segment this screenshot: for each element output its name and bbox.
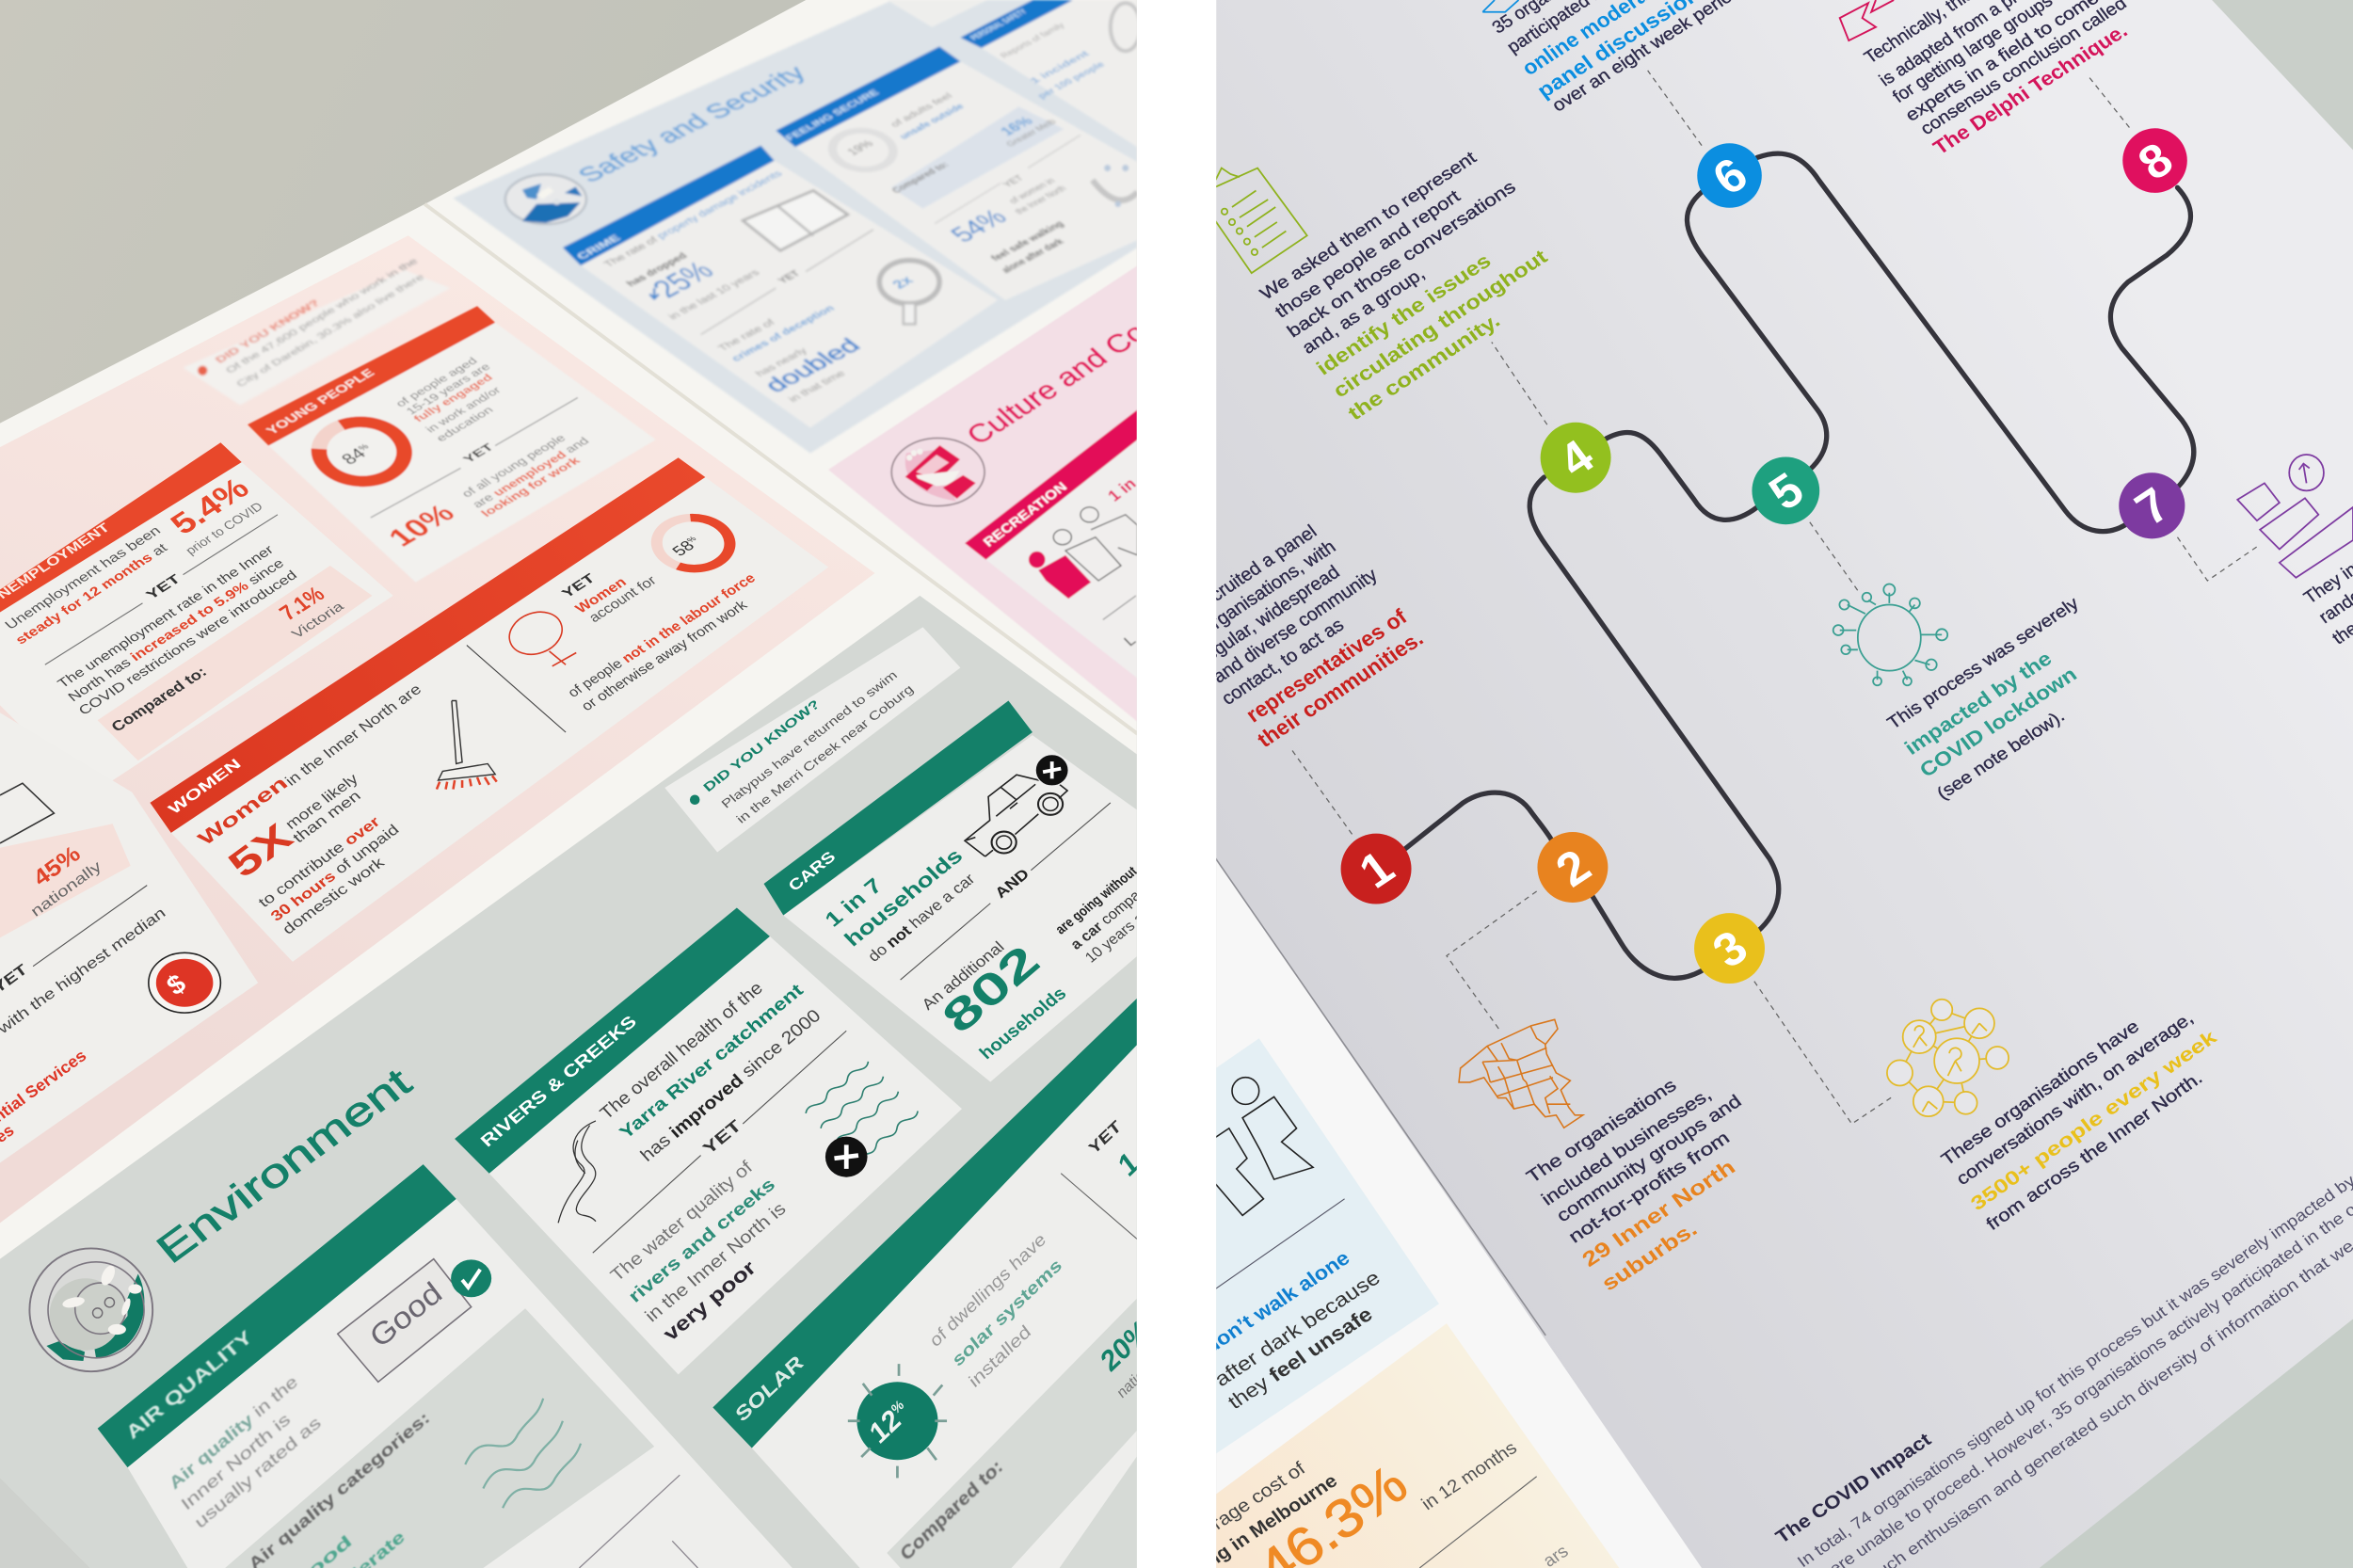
- text block: step 3 conversations: 3500+ people every week: [1967, 1026, 2221, 1215]
- card: feeling secure: [776, 46, 1138, 300]
- card: crime: The rate of property damage incidents: [601, 168, 786, 269]
- card: crime: has dropped: [624, 251, 690, 289]
- icon: cropped outline box: [0, 783, 54, 843]
- card: feeling secure: Compared to:: [890, 161, 952, 195]
- card: solar: 1: [1112, 1144, 1144, 1183]
- card: young people: 84: [338, 445, 371, 468]
- card: cars: are going without: [1052, 864, 1141, 937]
- card: women: %: [684, 535, 698, 544]
- text block: step 4 identify the issues: those people and report: [1272, 185, 1465, 322]
- text block: step 2 organisations: included businesses,: [1538, 1085, 1716, 1209]
- card: rivers and creeks: YET: [699, 1116, 745, 1158]
- icon: inner north suburbs map: [1459, 1019, 1583, 1128]
- card: feeling secure: FEELING SECURE: [784, 88, 882, 143]
- text block: step 3 conversations: [1937, 1008, 2221, 1234]
- card: women: in the Inner North are: [282, 681, 425, 789]
- compared box: 45 percent nationally: 45%: [28, 840, 86, 891]
- step 5 node: 5: [1759, 462, 1814, 520]
- card: rivers and creeks: RIVERS & CREEKS: [476, 1012, 640, 1150]
- card: recreation: L: [1121, 632, 1140, 649]
- icon: blue cropped shape: [1482, 0, 1519, 12]
- card: women: to contribute over: [256, 814, 383, 911]
- card: solar: installed: [965, 1320, 1034, 1391]
- text block: step 5 covid impact note: COVID lockdown: [1915, 663, 2081, 782]
- card: personal safety: [960, 0, 1141, 147]
- top sliver card: [887, 0, 987, 27]
- step 1 node: [1341, 834, 1412, 904]
- heading: safety and security: Safety and Security: [571, 60, 812, 186]
- text block: step 1 recruit a panel: a regular, widespread: [1182, 562, 1344, 677]
- card: air quality: AIR QUALITY: [122, 1327, 257, 1444]
- text block: step 2 organisations: 29 Inner North: [1577, 1155, 1739, 1272]
- card: rivers and creeks: in the Inner North is: [642, 1199, 790, 1326]
- card: young people: of people aged: [392, 355, 480, 409]
- card: feeling secure: 16%: [998, 115, 1037, 138]
- card: unemployment: The unemployment rate in the Inner: [55, 543, 277, 691]
- grey paper page: [1215, 0, 2353, 1568]
- text block: step 2 organisations: suburbs.: [1597, 1217, 1702, 1295]
- card: cars: [764, 701, 1175, 1081]
- card: unemployment: prior to COVID: [183, 500, 265, 557]
- card: women: domestic work: [280, 856, 388, 937]
- step 2 node: 2: [1545, 839, 1600, 897]
- donut chart: 58 percent: [651, 514, 736, 572]
- card: cars: CARS: [785, 848, 840, 895]
- compared to box: 7.1%: [275, 583, 329, 625]
- centre fold of the spread: [424, 204, 1138, 734]
- text block: step 4 identify the issues: [1257, 147, 1552, 424]
- step 7 node: 7: [2125, 477, 2180, 536]
- card: recreation: 1 in: [1104, 474, 1140, 504]
- icon: car with plus badge: [965, 755, 1068, 856]
- card: crime: crimes of deception: [729, 304, 838, 363]
- card: young people: looking for work: [478, 454, 584, 519]
- text block: step 4 identify the issues: circulating throughout: [1329, 246, 1552, 402]
- card: women: more likely: [282, 772, 361, 833]
- text block: step 1 recruit a panel: We recruited a panel: [1165, 521, 1321, 632]
- text block: step 4 identify the issues: identify the issues: [1312, 249, 1496, 379]
- icon: sun with 12 percent: %: [889, 1397, 907, 1417]
- card: young people: YOUNG PEOPLE: [264, 366, 377, 437]
- right photo: engagement process page: [1145, 0, 2353, 1568]
- booklet underneath: [1146, 858, 1702, 1568]
- card: unemployment: Unemployment has been: [2, 523, 164, 632]
- card: feeling secure: YET: [1001, 174, 1027, 189]
- card: air quality: [98, 1164, 792, 1568]
- card: rivers and creeks: Yarra River catchment: [616, 980, 808, 1144]
- card: young people: 10%: [381, 499, 461, 552]
- card: crime: has nearly: [753, 346, 810, 378]
- card: crime: in the last 10 years: [666, 268, 763, 322]
- text block: step 5 covid impact note: impacted by the: [1900, 648, 2057, 760]
- panel: employment section pink background: [0, 235, 875, 1223]
- card: women: 58: [668, 537, 698, 559]
- card: women: Women: [194, 773, 293, 850]
- card: did you know, Darebin workers: [184, 257, 450, 405]
- card: women: YET: [559, 571, 599, 601]
- card: personal safety: Reports of family: [999, 22, 1067, 60]
- text block: step 4 identify the issues: We asked them to represent: [1257, 147, 1481, 303]
- icon: female symbol: [508, 611, 577, 666]
- compared to box: Compared to:: [108, 664, 210, 735]
- card: young people: [248, 306, 656, 583]
- panel: cream cost of living card: [1146, 1323, 1619, 1568]
- card: crime: doubled: [760, 335, 866, 396]
- card: feeling secure: the Inner North: [1014, 184, 1069, 216]
- step 4 node: [1541, 423, 1611, 493]
- bottom-left background corner: [0, 1478, 90, 1568]
- card: feeling secure: 19%: [843, 137, 876, 157]
- card: women: 30 hours of unpaid: [267, 823, 403, 924]
- card: women: of people not in the labour force: [565, 570, 759, 700]
- card: young people: education: [433, 404, 496, 443]
- paper sheet: [0, 0, 1137, 1259]
- card: feeling secure: feel safe walking: [989, 219, 1066, 263]
- icon: people network: [1887, 1000, 2009, 1116]
- panel: environment section background: [0, 596, 1138, 1568]
- compared box: 45 percent nationally: [0, 824, 131, 937]
- panel: cream cost of living card: in 12 months: [1418, 1438, 1521, 1514]
- card: cars: a car compared to: [1067, 864, 1175, 952]
- compared to box: Victoria: [289, 600, 347, 642]
- text block: step 1 recruit a panel: contact, to act as: [1218, 615, 1348, 710]
- card: young people: %: [357, 442, 372, 453]
- icon: sun with 12 percent: 12: [865, 1403, 906, 1450]
- background corner top right: [2212, 0, 2353, 150]
- card: young people: YET: [459, 440, 497, 465]
- icon: water waves: [804, 1060, 920, 1165]
- card: crime: YET: [776, 269, 803, 285]
- card: solar: SOLAR: [732, 1352, 808, 1427]
- card: crime: in that time: [786, 369, 848, 404]
- icon: virus: [1833, 584, 1947, 685]
- card: young people: in work and/or: [423, 384, 504, 435]
- card: did you know, platypus: DID YOU KNOW?: [700, 697, 823, 794]
- card: cars: households: [976, 984, 1070, 1064]
- icon: winding river: [558, 1121, 596, 1223]
- text block: step 5 covid impact note: This process was severely: [1883, 593, 2083, 732]
- text block: step 2 organisations: not-for-profits from: [1565, 1128, 1734, 1247]
- icon: broom: [437, 701, 497, 790]
- icon: plus badge: [825, 1137, 868, 1177]
- icon: purple ranking boxes: [2237, 455, 2353, 578]
- card: women: account for: [585, 573, 660, 626]
- text block: step 2 organisations: community groups and: [1553, 1092, 1746, 1226]
- card: cars: AND: [992, 867, 1032, 902]
- card: air quality: Inner North is: [178, 1409, 294, 1514]
- text block: step 3 conversations: These organisations have: [1937, 1016, 2142, 1169]
- text block: step 1 recruit a panel: and diverse community: [1209, 565, 1382, 687]
- card: unemployment: 5.4%: [164, 472, 256, 541]
- card: crime: [563, 146, 998, 427]
- good rating box: [338, 1259, 491, 1382]
- compared to box: nationally: [1114, 1345, 1170, 1401]
- card: cars: households: [840, 844, 968, 951]
- card: unemployment: North has increased to 5.9% since: [65, 556, 287, 705]
- card: did you know, Darebin workers: Of the 47,600 people who work in the: [224, 257, 421, 376]
- step 5 node: [1752, 456, 1819, 524]
- card: solar: YET: [1085, 1116, 1125, 1158]
- text block: step 5 covid impact note: [1883, 593, 2083, 803]
- card: rivers and creeks: [455, 908, 962, 1374]
- step 3 node: [1694, 913, 1765, 984]
- card: women: or otherwise away from work: [578, 598, 751, 714]
- card: rivers and creeks: rivers and creeks: [625, 1175, 779, 1306]
- card: crime: 25%: [646, 257, 721, 303]
- icon: air waves: [465, 1399, 581, 1508]
- icon: dollar coin: $: [162, 968, 192, 1001]
- panel: pale blue safety card: after dark because: [1210, 1267, 1385, 1391]
- card: rivers and creeks: has improved since 2000: [637, 1006, 824, 1166]
- card: did you know, Darebin workers: City of Darebin, 30.3% also live there: [234, 273, 427, 389]
- card: women: Women: [572, 575, 630, 616]
- card: personal safety: 1 incident: [1029, 50, 1093, 86]
- step 8 node: 8: [2128, 133, 2183, 190]
- card: young people: fully engaged: [410, 372, 496, 424]
- card: cars: do not have a car: [864, 870, 979, 966]
- panel: culture and community: [828, 265, 1153, 722]
- card: air quality: usually rated as: [191, 1413, 325, 1532]
- card: unemployment: steady for 12 months at: [13, 541, 170, 648]
- card: personal safety: per 100 people: [1036, 60, 1108, 101]
- card: women: [150, 457, 828, 962]
- good rating box: Good: [363, 1275, 448, 1354]
- dashed leader lines: [1292, 71, 2260, 1124]
- card: young people: 15-19 years are: [403, 360, 494, 417]
- text block: step 4 identify the issues: back on those conversations: [1283, 177, 1519, 341]
- donut chart: 84 percent: [311, 416, 413, 488]
- text block: step 8 Delphi technique: The Delphi Technique.: [1929, 20, 2132, 159]
- text block: the covid impact footnote: In total, 74 organisations signed up for this process but it was severely impacted by: [1794, 1171, 2353, 1568]
- card: rivers and creeks: The water quality of: [607, 1158, 758, 1286]
- text block: step 4 identify the issues: the community.: [1344, 310, 1504, 424]
- heading: environment: Environment: [148, 1061, 420, 1272]
- compared to box: 20%: [1096, 1314, 1156, 1378]
- text block: step 4 identify the issues: and, as a group,: [1298, 264, 1429, 358]
- card: women: 5X: [218, 815, 301, 886]
- panel: pale blue safety card: don’t walk alone: [1200, 1247, 1354, 1358]
- card: women: WOMEN: [166, 757, 245, 818]
- card: did you know, platypus: [664, 627, 960, 853]
- icon: possum badge: [29, 1248, 152, 1371]
- heading: culture and community: Culture and Co: [961, 318, 1153, 450]
- card: recreation: RECREATION: [981, 480, 1070, 550]
- card: feeling secure: 54%: [945, 205, 1014, 247]
- icon: magenta ribbon: [1840, 0, 1894, 40]
- card: feeling secure: of women in: [1007, 177, 1058, 206]
- card: solar: of dwellings have: [926, 1228, 1049, 1351]
- text block: step 8 Delphi technique: [1861, 0, 2132, 159]
- card: did you know, platypus: in the Merri Creek near Coburg: [733, 682, 916, 826]
- card: feeling secure: alone after dark: [1000, 237, 1067, 275]
- card: crime: 2x: [889, 274, 917, 292]
- card: crime: The rate of: [716, 317, 778, 353]
- background corner bottom right: [2040, 1319, 2353, 1568]
- photo background: [0, 0, 1138, 1568]
- compared to box: [887, 1298, 1170, 1568]
- card: feeling secure: of adults feel: [888, 92, 955, 129]
- text block: step 3 conversations: from across the Inner North.: [1982, 1067, 2206, 1234]
- card: women: than men: [290, 789, 364, 846]
- icon: raised hand with ticket: [891, 439, 984, 506]
- icon: sun with 12 percent: [848, 1364, 947, 1478]
- icon: safety badge: [505, 174, 586, 224]
- icon: dollar coin: [149, 952, 220, 1013]
- text block: step 1 recruit a panel: representatives of: [1241, 604, 1412, 727]
- card: cars: 1 in 7: [820, 873, 887, 931]
- card: crime: CRIME: [575, 233, 623, 262]
- section background: [454, 0, 1138, 453]
- card: rivers and creeks: very poor: [659, 1256, 761, 1345]
- step 2 node: [1537, 832, 1608, 903]
- panel: pale blue safety card: [1200, 1038, 1439, 1454]
- step 6 node: 6: [1703, 148, 1757, 205]
- card: unemployment: COVID restrictions were introduced: [76, 568, 300, 718]
- panel: safety and security: [454, 0, 1141, 453]
- text block: step 2 organisations: [1523, 1076, 1746, 1295]
- card: recreation: [965, 409, 1140, 679]
- card: air quality: Air quality in the: [166, 1371, 301, 1493]
- icon: clipboard checklist: [1197, 168, 1307, 273]
- text block: step 2 organisations: The organisations: [1523, 1076, 1680, 1187]
- compared box: 45 percent nationally: nationally: [28, 858, 104, 920]
- card: cars: 10 years ago: [1082, 900, 1161, 966]
- left photo: printed report spread: [0, 0, 1175, 1568]
- section background: [828, 265, 1138, 722]
- card: young people: are unemployed and: [469, 435, 592, 510]
- card: unemployment: [0, 442, 393, 795]
- journey path line: [1404, 153, 2194, 978]
- text block: step 7 cropped: [2300, 539, 2353, 648]
- text block: step 1 recruit a panel: [1145, 509, 1429, 765]
- card: feeling secure: unsafe outside: [898, 103, 967, 141]
- card: did you know, platypus: Platypus have returned to swim: [718, 668, 900, 811]
- card: income and essential services: [0, 712, 258, 1163]
- card: cars: An additional: [919, 938, 1008, 1014]
- card: feeling secure: Greater Melb: [1004, 118, 1059, 149]
- text block: the covid impact footnote: The COVID Impact: [1772, 1430, 1935, 1548]
- text block: step 3 conversations: conversations with, on average,: [1952, 1008, 2197, 1189]
- card: unemployment: YET: [143, 572, 184, 602]
- card: solar: [712, 998, 1170, 1568]
- text block: step 1 recruit a panel: their communities.: [1253, 626, 1428, 752]
- text block: step 1 recruit a panel: of 74 organisations, with: [1160, 536, 1339, 664]
- card: young people: of all young people: [458, 432, 568, 500]
- step 4 node: 4: [1549, 429, 1604, 488]
- compared to box: Compared to:: [898, 1456, 1006, 1565]
- step 1 node: 1: [1350, 840, 1403, 898]
- card: rivers and creeks: The overall health of the: [597, 979, 767, 1124]
- text block: step 5 covid impact note: (see note below).: [1933, 706, 2068, 803]
- compared to box: [98, 566, 372, 760]
- card: did you know, Darebin workers: DID YOU KNOW?: [213, 298, 323, 365]
- card: cars: 802: [933, 936, 1049, 1043]
- panel: pale blue safety card: they feel unsafe: [1224, 1303, 1377, 1414]
- card: solar: solar systems: [949, 1254, 1065, 1370]
- text block: step 8 Delphi technique: consensus conclusion called: [1916, 0, 2130, 138]
- step 3 node: 3: [1703, 920, 1757, 978]
